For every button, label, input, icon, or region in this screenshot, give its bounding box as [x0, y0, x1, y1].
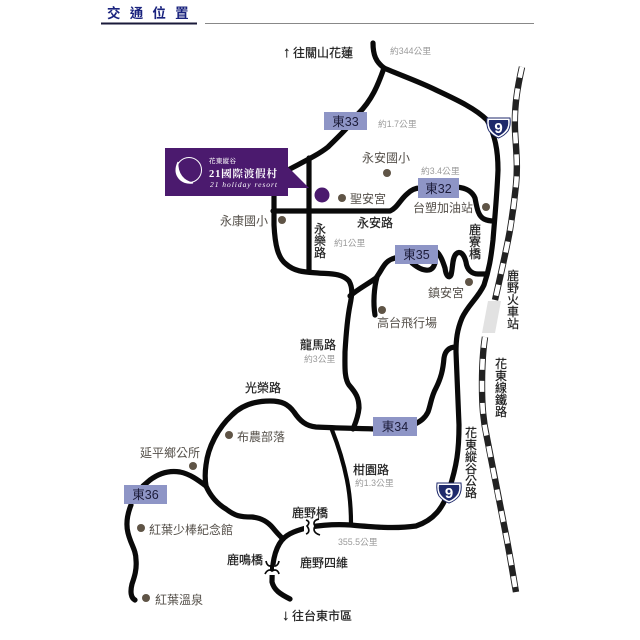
place: 延平鄉公所: 延平鄉公所 — [140, 446, 200, 460]
distance: 3 km: 約3公里 — [304, 353, 335, 364]
label: 花東線鐵路: 線 — [495, 380, 507, 395]
label: 鹿寮橋: 寮 — [469, 234, 481, 249]
route box 東35: 東35 — [403, 248, 430, 262]
distance: 1 km: 約1公里 — [334, 237, 365, 248]
place: 永安國小: 永安國小 — [362, 150, 410, 165]
place: 鎮安宮: 鎮安宮 — [428, 285, 464, 300]
place: 紅葉溫泉: 紅葉溫泉 — [155, 593, 203, 607]
place: 高台飛行場 — [377, 306, 437, 330]
label: 鹿寮橋: 橋 — [469, 247, 481, 261]
resort location marker — [314, 188, 330, 202]
place: 永康國小 — [220, 213, 286, 228]
icon: crescent logo — [176, 158, 202, 183]
place: 延平鄉公所 — [140, 446, 200, 470]
route box 東33: 東33 — [332, 115, 359, 129]
place: 紅葉少棒紀念館: 紅葉少棒紀念館 — [149, 522, 233, 537]
label: 鹿寮橋: 鹿 — [469, 222, 481, 237]
label: 鹿野火車站: 站 — [507, 317, 519, 331]
place: 台塑加油站: 台塑加油站 — [413, 200, 473, 215]
route box 東33 — [324, 112, 367, 130]
distance: 1.3 km: 約1.3公里 — [355, 477, 394, 488]
icon: bridge 鹿鳴橋 — [265, 561, 280, 575]
road: 永安路: 永安路 — [357, 215, 393, 230]
place: 永康國小: 永康國小 — [220, 213, 268, 228]
label: 鹿野火車站: 鹿 — [507, 268, 519, 283]
place: 布農部落: 布農部落 — [237, 429, 285, 444]
icon: highway 9 shield north: 9 — [494, 120, 503, 137]
road: 花東縱谷公路: 花 — [465, 425, 477, 440]
road network — [127, 43, 498, 600]
road: 花東縱谷公路: 路 — [465, 485, 477, 500]
label: 花東線鐵路: 鐵 — [495, 392, 507, 407]
label: 往關山花蓮: 往關山花蓮 — [293, 45, 353, 60]
label: 鹿野橋: 鹿野橋 — [292, 505, 328, 520]
heading: 交通位置: 交通位置 — [107, 5, 198, 21]
route box 東34: 東34 — [382, 420, 408, 434]
label: 往台東市區: 往台東市區 — [292, 608, 352, 623]
label: 花東線鐵路: 花 — [495, 356, 507, 371]
distance: 1.7 km: 約1.7公里 — [378, 118, 417, 129]
label: 鹿野四維: 鹿野四維 — [300, 555, 348, 570]
road: 光榮路: 光榮路 — [245, 380, 281, 395]
logo text: 21國際渡假村 — [209, 167, 278, 180]
road: 花東縱谷公路: 谷 — [465, 462, 477, 476]
road: 永樂路: 永 — [314, 222, 326, 236]
route box 東32 — [418, 178, 459, 198]
label: 花東線鐵路: 東 — [495, 369, 507, 383]
railway line — [482, 67, 522, 592]
logo text: 21 holiday resort — [210, 180, 278, 189]
distance: 344 km: 約344公里 — [390, 45, 431, 56]
station marker — [482, 301, 501, 333]
place: 高台飛行場: 高台飛行場 — [377, 315, 437, 330]
road: 永樂路: 路 — [314, 245, 326, 260]
road: 永樂路: 樂 — [314, 233, 326, 248]
label: 鹿野火車站: 火 — [507, 293, 519, 307]
distance: 355.5 km: 355.5公里 — [338, 537, 378, 547]
road: 柑園路: 柑園路 — [353, 462, 389, 477]
label: 鹿鳴橋: 鹿鳴橋 — [227, 552, 263, 567]
label: 鹿野火車站: 野 — [507, 281, 519, 295]
place: 聖安宮: 聖安宮 — [350, 191, 386, 206]
route box 東35 — [395, 245, 438, 264]
icon: highway 9 shield south: 9 — [445, 485, 453, 502]
road: 花東縱谷公路: 公 — [465, 474, 477, 488]
distance: 3.4 km: 約3.4公里 — [421, 165, 460, 176]
road: 花東縱谷公路: 東 — [465, 438, 477, 452]
logo text: 花東縱谷 — [209, 156, 236, 165]
route box 東34 — [373, 417, 417, 436]
road: 龍馬路: 龍馬路 — [300, 337, 336, 352]
icon: highway 9 shield north — [487, 118, 510, 138]
road: 花東縱谷公路: 縱 — [465, 450, 477, 464]
label: 鹿野火車站: 車 — [507, 305, 519, 319]
icon: bridge 鹿野橋 — [304, 519, 320, 535]
route box 東32: 東32 — [425, 182, 452, 196]
route box 東36 — [124, 485, 167, 504]
resort logo banner — [165, 148, 309, 196]
label: 往台東市區: ↓ — [282, 607, 290, 624]
place: 鎮安宮 — [428, 278, 473, 300]
route box 東36: 東36 — [132, 488, 159, 502]
icon: highway 9 shield south — [437, 483, 461, 503]
label: 花東線鐵路: 路 — [495, 404, 507, 419]
logo text — [209, 156, 278, 189]
label: 往關山花蓮: ↑ — [283, 44, 290, 61]
place: 永安國小 — [362, 150, 410, 177]
